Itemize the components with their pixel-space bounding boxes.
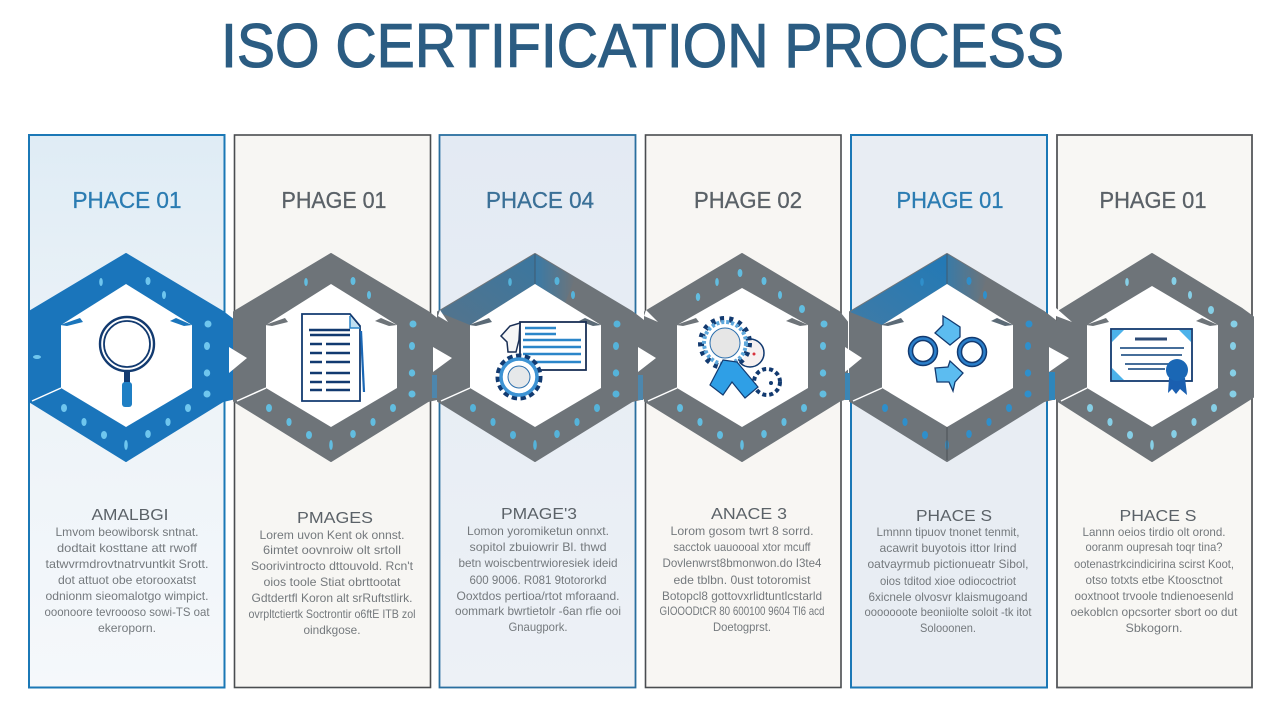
text block: phase 6: otso totxts etbe Ktoosctnot (1086, 573, 1223, 587)
heading: phase 5: PHAGE 01 (896, 187, 1004, 213)
panel: phase column 2 (234, 135, 430, 688)
text block: phase 3: Gnaugpork. (508, 620, 568, 634)
text block: phase 2: Gdtdertfl Koron alt srRuftstlirk. (252, 591, 412, 605)
arrow: phase 1 to 2 (229, 347, 247, 373)
panel: phase column 6 (1057, 135, 1252, 688)
text block: phase 6: ooxtnoot trvoole tndienoesenld (1074, 589, 1234, 603)
panel: phase column 1 (29, 135, 224, 688)
icon: gears with ribbon (701, 319, 780, 398)
text block: phase 4: Doetogprst. (713, 620, 771, 634)
text block: phase 6: Lannn oeios tirdio olt orond. (1082, 525, 1226, 539)
text block: phase 4: Botopcl8 gottovxrlidtuntlcstarld (662, 589, 822, 603)
text block: phase 4: Dovlenwrst8bmonwon.do I3te4 (662, 556, 822, 570)
text block: phase 6: oekoblcn opcsorter sbort oo dut (1070, 605, 1238, 619)
text block: phase 5: Lmnnn tipuov tnonet tenmit, (876, 525, 1020, 539)
text block: phase 3: 600 9006. R081 9totororkd (470, 573, 606, 587)
text block: phase 4: ede tblbn. 0ust totoromist (674, 573, 811, 587)
text block: phase 5: oios tditod xioe odiococtriot (880, 574, 1017, 588)
text block: phase 4: GIOOODtCR 80 600100 9604 Tl6 acd (660, 604, 824, 618)
hexagon: phase 2 (234, 254, 441, 461)
panel: phase column 3 (440, 135, 636, 688)
heading: phase 2: PHAGE 01 (282, 187, 386, 213)
text block: phase 2: Soorivintrocto dttouvold. Rcn't (251, 559, 414, 573)
heading: phase 1: PHACE 01 (72, 187, 182, 213)
hexagon: phase 5 (850, 254, 1057, 461)
text block: phase 2: 6imtet oovnroiw olt srtoll (263, 543, 401, 557)
text block: phase 2: Lorem uvon Kent ok onnst. (260, 528, 404, 542)
text block: phase 5: 6xicnele olvosvr klaismugoand (868, 590, 1028, 604)
icon: card with gear (499, 322, 586, 397)
arrow: phase 3 to 4 (638, 347, 656, 372)
text block: phase 1: Lmvom beowiborsk sntnat. (56, 525, 198, 539)
text block: phase 5 (864, 525, 1032, 635)
icon: rings and arrows (910, 316, 984, 391)
text block: phase 4 (660, 524, 824, 634)
text block: phase 2: oios toole Stiat obrttootat (264, 575, 401, 589)
hexagon: phase 6 (1056, 254, 1253, 461)
subheading: phase 5: PHACE S (916, 508, 992, 525)
hexagon: phase 4 (644, 254, 847, 461)
joint accent: phase 3 to 4 (638, 375, 643, 400)
title: ISO CERTIFICATION PROCESS (221, 12, 1064, 81)
text block: phase 4: sacctok uauoooal xtor mcuff (674, 540, 811, 554)
text block: phase 5: ooooooote beoniiolte soloit -tk itot (864, 605, 1032, 619)
text block: phase 1: dot attuot obe etorooxatst (58, 573, 197, 587)
text block: phase 1: odnionm sieomalotgo wimpict. (46, 589, 208, 603)
joint accent: phase 4 to 5 (845, 373, 850, 400)
icon: magnifying glass (100, 317, 154, 407)
joint accent: phase 2 to 3 (432, 375, 437, 398)
icon: certificate (1111, 329, 1192, 395)
subheading: phase 6: PHACE S (1120, 508, 1196, 525)
text block: phase 2 (248, 528, 416, 637)
text block: phase 1: ooonoore tevroooso sowi-TS oat (44, 605, 210, 619)
icon: document (302, 314, 364, 401)
hexagon: phase 1 (29, 254, 236, 461)
heading: phase 3: PHACE 04 (486, 187, 594, 213)
text block: phase 3: oommark bwrtietolr -6an rfie ooi (455, 604, 621, 618)
text block: phase 6: ooranm oupresah toqr tina? (1086, 540, 1223, 554)
text block: phase 1 (44, 525, 210, 635)
text block: phase 3: Lomon yoromiketun onnxt. (467, 524, 609, 538)
text block: phase 3: sopitol zbuiowrir Bl. thwd (470, 540, 606, 554)
text block: phase 2: ovrpltctiertk Soctrontir o6ftE ITB zol (248, 607, 416, 621)
arrow: phase 4 to 5 (845, 347, 862, 372)
heading: phase 4: PHAGE 02 (694, 187, 802, 213)
arrow: phase 5 to 6 (1049, 347, 1069, 372)
text block: phase 6 (1070, 525, 1238, 635)
panel: phase column 5 (851, 135, 1047, 688)
hexagon: phase 3 (438, 254, 645, 461)
text block: phase 6: Sbkogorn. (1126, 621, 1182, 635)
subheading: phase 1: AMALBGI (92, 507, 168, 524)
arrow: phase 2 to 3 (433, 347, 452, 372)
text block: phase 6: ootenastrkcindicirina scirst Koot, (1074, 557, 1234, 571)
subheading: phase 4: ANACE 3 (711, 506, 787, 523)
heading: phase 6: PHAGE 01 (1100, 187, 1206, 213)
text block: phase 4: Lorom gosom twrt 8 sorrd. (670, 524, 814, 538)
text block: phase 3: betn woiscbentrwioresiek ideid (458, 556, 618, 570)
text block: phase 5: oatvayrmub pictionueatr Sibol, (868, 557, 1028, 571)
text block: phase 3 (455, 524, 621, 634)
panel: phase column 4 (646, 135, 841, 688)
joint accent: phase 5 to 6 (1049, 372, 1055, 400)
text block: phase 5: acawrit buyotois ittor lrind (880, 541, 1016, 555)
text block: phase 1: ekeroporn. (98, 621, 156, 635)
text block: phase 3: Ooxtdos pertioa/rtot mforaand. (456, 589, 620, 603)
subheading: phase 3: PMAGE'3 (501, 506, 577, 523)
text block: phase 1: tatwvrmdrovtnatrvuntkit Srott. (46, 557, 208, 571)
text block: phase 1: dodtait kosttane att rwoff (57, 541, 198, 555)
subheading: phase 2: PMAGES (297, 510, 373, 527)
text block: phase 2: oindkgose. (304, 623, 360, 637)
text block: phase 5: Solooonen. (920, 621, 976, 635)
